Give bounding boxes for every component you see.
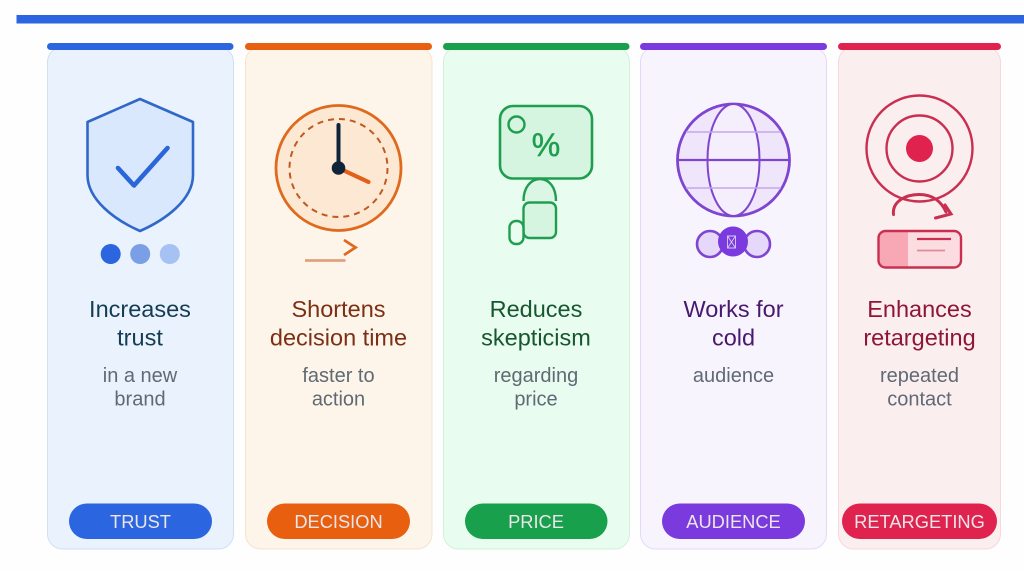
icon: price tag and hand: % <box>532 127 560 163</box>
text: repeated contact: contact <box>887 388 952 410</box>
icon: globe with people <box>678 104 790 257</box>
panel: retargeting <box>838 43 1001 549</box>
icon: clock <box>276 106 401 260</box>
icon: price tag and hand <box>500 106 592 244</box>
text: in a new brand: brand <box>114 388 166 410</box>
heading: enhances retargeting: Enhances <box>867 296 972 322</box>
pill: decision: DECISION <box>294 511 383 532</box>
panel accent: retargeting <box>838 43 1001 50</box>
pill: price: PRICE <box>508 511 564 532</box>
pill: trust <box>69 504 212 539</box>
icon: target with loop and card <box>866 96 972 268</box>
panel: decision <box>245 43 432 549</box>
panel: price <box>443 43 630 549</box>
pill: retargeting <box>842 504 997 539</box>
panel accent: decision <box>245 43 432 50</box>
top bar <box>16 15 1024 24</box>
pill: trust: TRUST <box>110 511 171 532</box>
heading: shortens decision time: Shortens <box>291 296 386 322</box>
heading: works for cold: Works for <box>683 296 784 322</box>
text: regarding price: regarding <box>494 365 578 387</box>
heading: works for cold: cold <box>712 324 755 350</box>
text: repeated contact: repeated <box>880 365 959 387</box>
pill: audience <box>662 504 805 539</box>
panel accent: trust <box>47 43 234 50</box>
pill: price <box>465 504 608 539</box>
text: regarding price: price <box>514 388 558 410</box>
heading: shortens decision time: decision time <box>270 324 407 350</box>
heading: increases trust: Increases <box>89 296 191 322</box>
text: in a new brand: in a new <box>103 365 178 387</box>
pill: retargeting: RETARGETING <box>854 511 985 532</box>
heading: reduces skepticism: skepticism <box>481 324 591 350</box>
icon: shield with check <box>88 99 193 264</box>
text: faster to action: faster to <box>302 365 375 387</box>
heading: increases trust: trust <box>117 324 163 350</box>
heading: reduces skepticism: Reduces <box>490 296 582 322</box>
text: audience: audience <box>693 365 774 387</box>
heading: enhances retargeting: retargeting <box>863 324 976 350</box>
text: faster to action: action <box>312 388 365 410</box>
panel: audience <box>640 43 827 549</box>
panel accent: price <box>443 43 630 50</box>
panel accent: audience <box>640 43 827 50</box>
panel: trust <box>47 43 234 549</box>
pill: decision <box>267 504 410 539</box>
pill: audience: AUDIENCE <box>686 511 781 532</box>
